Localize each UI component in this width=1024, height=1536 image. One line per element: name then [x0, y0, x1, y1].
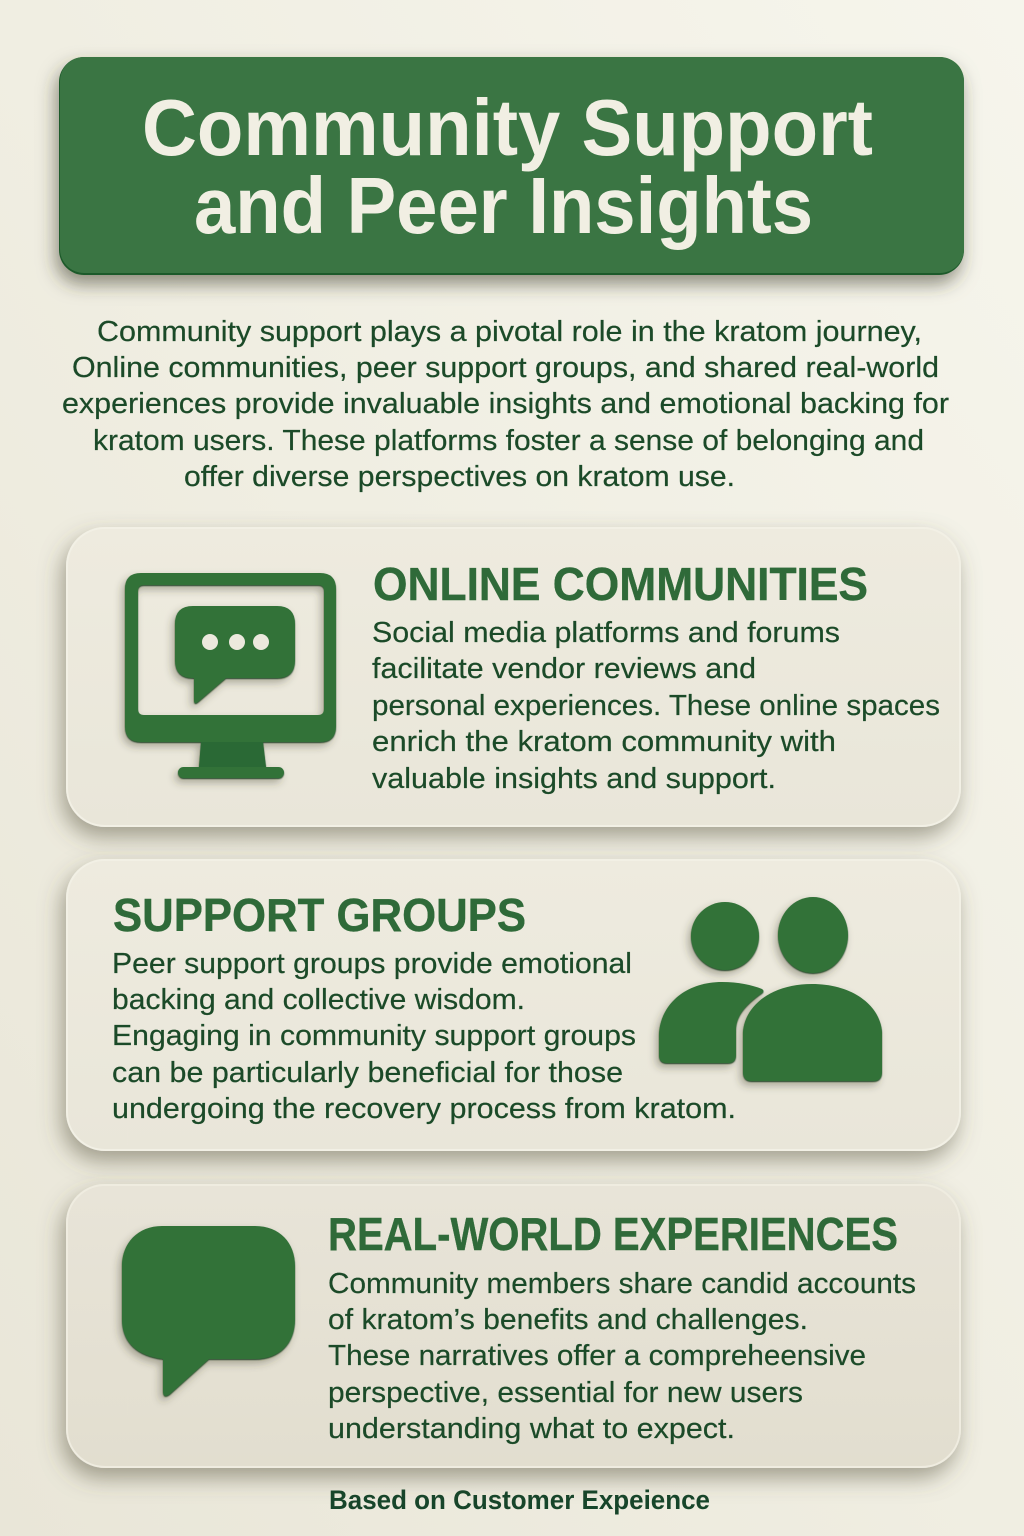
title text: [142, 83, 873, 250]
heading: real-world experiences: REAL-WORLD EXPERIENCES: [328, 1208, 898, 1260]
icon: speech bubble: [122, 1226, 295, 1396]
heading: support groups: SUPPORT GROUPS: [113, 889, 526, 941]
intro paragraph: [62, 316, 949, 493]
intro paragraph: Online communities, peer support groups, and shared real-world: [72, 352, 939, 384]
body: support groups: can be particularly beneficial for those: [112, 1057, 623, 1089]
body: online communities: personal experiences. These online spaces: [372, 690, 940, 722]
intro paragraph: kratom users. These platforms foster a sense of belonging and: [93, 425, 924, 457]
intro paragraph: Community support plays a pivotal role in the kratom journey,: [97, 316, 922, 348]
icon: monitor with chat bubble: [125, 573, 336, 778]
body: online communities: facilitate vendor reviews and: [372, 653, 756, 685]
body: real-world experiences: These narratives offer a compreheensive: [328, 1340, 866, 1372]
body: online communities: valuable insights and support.: [372, 763, 776, 795]
body: real-world experiences: perspective, essential for new users: [328, 1377, 803, 1409]
title banner: [59, 57, 964, 275]
panel: real-world experiences: [67, 1185, 960, 1467]
body: support groups: Engaging in community support groups: [112, 1020, 636, 1052]
intro paragraph: offer diverse perspectives on kratom use.: [184, 461, 735, 493]
title text: Community Support: [142, 83, 873, 172]
body: support groups: backing and collective wisdom.: [112, 984, 525, 1016]
body: real-world experiences: [328, 1268, 916, 1445]
heading: online communities: ONLINE COMMUNITIES: [373, 558, 868, 610]
icon: two people: [659, 897, 882, 1081]
panel: support groups: [67, 860, 960, 1150]
panel: online communities: [67, 528, 960, 826]
body: support groups: undergoing the recovery process from kratom.: [112, 1093, 736, 1125]
intro paragraph: experiences provide invaluable insights and emotional backing for: [62, 388, 949, 420]
body: support groups: [112, 948, 736, 1125]
body: online communities: Social media platforms and forums: [372, 617, 840, 649]
body: real-world experiences: of kratom’s benefits and challenges.: [328, 1304, 808, 1336]
body: online communities: enrich the kratom community with: [372, 726, 836, 758]
body: support groups: Peer support groups provide emotional: [112, 948, 632, 980]
title text: and Peer Insights: [194, 161, 813, 250]
footer note: Based on Customer Expeience: [329, 1485, 710, 1515]
body: real-world experiences: understanding what to expect.: [328, 1413, 735, 1445]
body: real-world experiences: Community members share candid accounts: [328, 1268, 916, 1300]
body: online communities: [372, 617, 940, 795]
